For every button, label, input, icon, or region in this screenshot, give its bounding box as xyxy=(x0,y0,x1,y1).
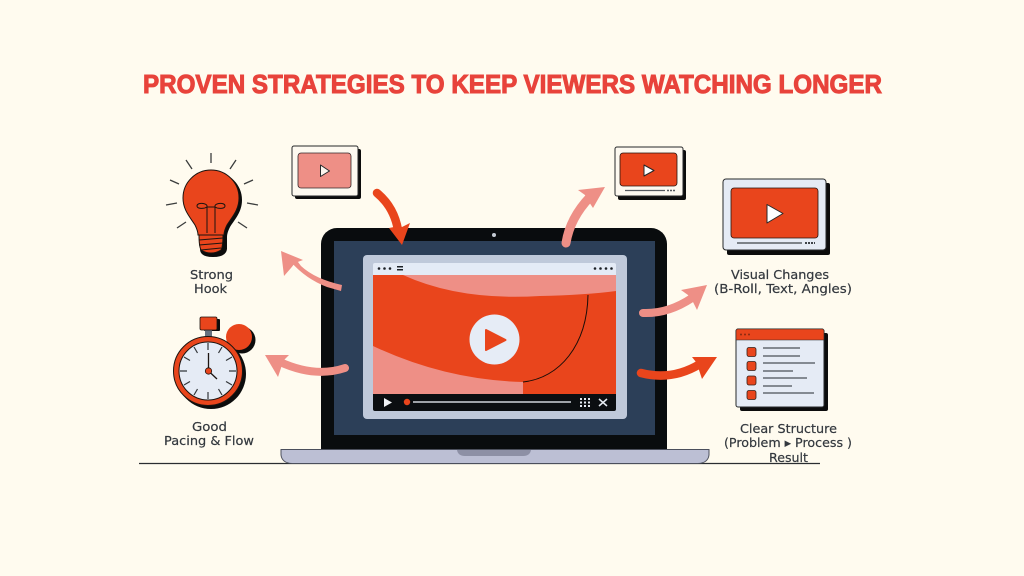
video player window xyxy=(363,255,627,419)
label: good pacing and flow: Pacing & Flow xyxy=(164,433,254,448)
ground line xyxy=(139,462,820,464)
label: good pacing and flow xyxy=(164,419,254,448)
play button xyxy=(470,314,520,364)
icon: structure list card xyxy=(736,329,828,411)
laptop lid xyxy=(321,228,667,449)
icon: small video card pink xyxy=(292,146,361,199)
label: clear structure: Result xyxy=(769,450,808,465)
control bar xyxy=(373,394,616,411)
icon: small video card red xyxy=(615,147,686,200)
label: visual changes: (B-Roll, Text, Angles) xyxy=(714,281,852,296)
laptop base xyxy=(281,450,709,464)
video frame xyxy=(373,275,616,394)
label: good pacing and flow: Good xyxy=(192,419,227,434)
laptop screen xyxy=(334,241,655,435)
icon: light bulb xyxy=(166,153,258,257)
title: PROVEN STRATEGIES TO KEEP VIEWERS WATCHING LONGER xyxy=(143,71,882,99)
label: strong hook xyxy=(190,267,233,296)
arrow: laptop to clear structure xyxy=(641,357,717,379)
laptop notch xyxy=(457,450,531,456)
arrow: laptop to strong hook xyxy=(281,251,342,291)
arrow: laptop to red video card xyxy=(566,187,605,243)
icon: stopwatch xyxy=(174,317,256,409)
label: clear structure: (Problem ▸ Process ) xyxy=(724,435,852,450)
title bar xyxy=(373,263,616,275)
arrow: video card to laptop xyxy=(377,193,410,245)
label: strong hook: Hook xyxy=(194,281,228,296)
laptop xyxy=(281,228,709,464)
label: clear structure xyxy=(724,421,852,465)
label: visual changes xyxy=(714,267,852,296)
webcam xyxy=(492,233,496,237)
arrow: laptop to visual changes xyxy=(643,285,707,313)
arrow: laptop to stopwatch xyxy=(265,355,345,377)
label: clear structure: Clear Structure xyxy=(740,421,837,436)
label: strong hook: Strong xyxy=(190,267,233,282)
icon: large video card xyxy=(723,179,830,255)
label: visual changes: Visual Changes xyxy=(731,267,829,282)
